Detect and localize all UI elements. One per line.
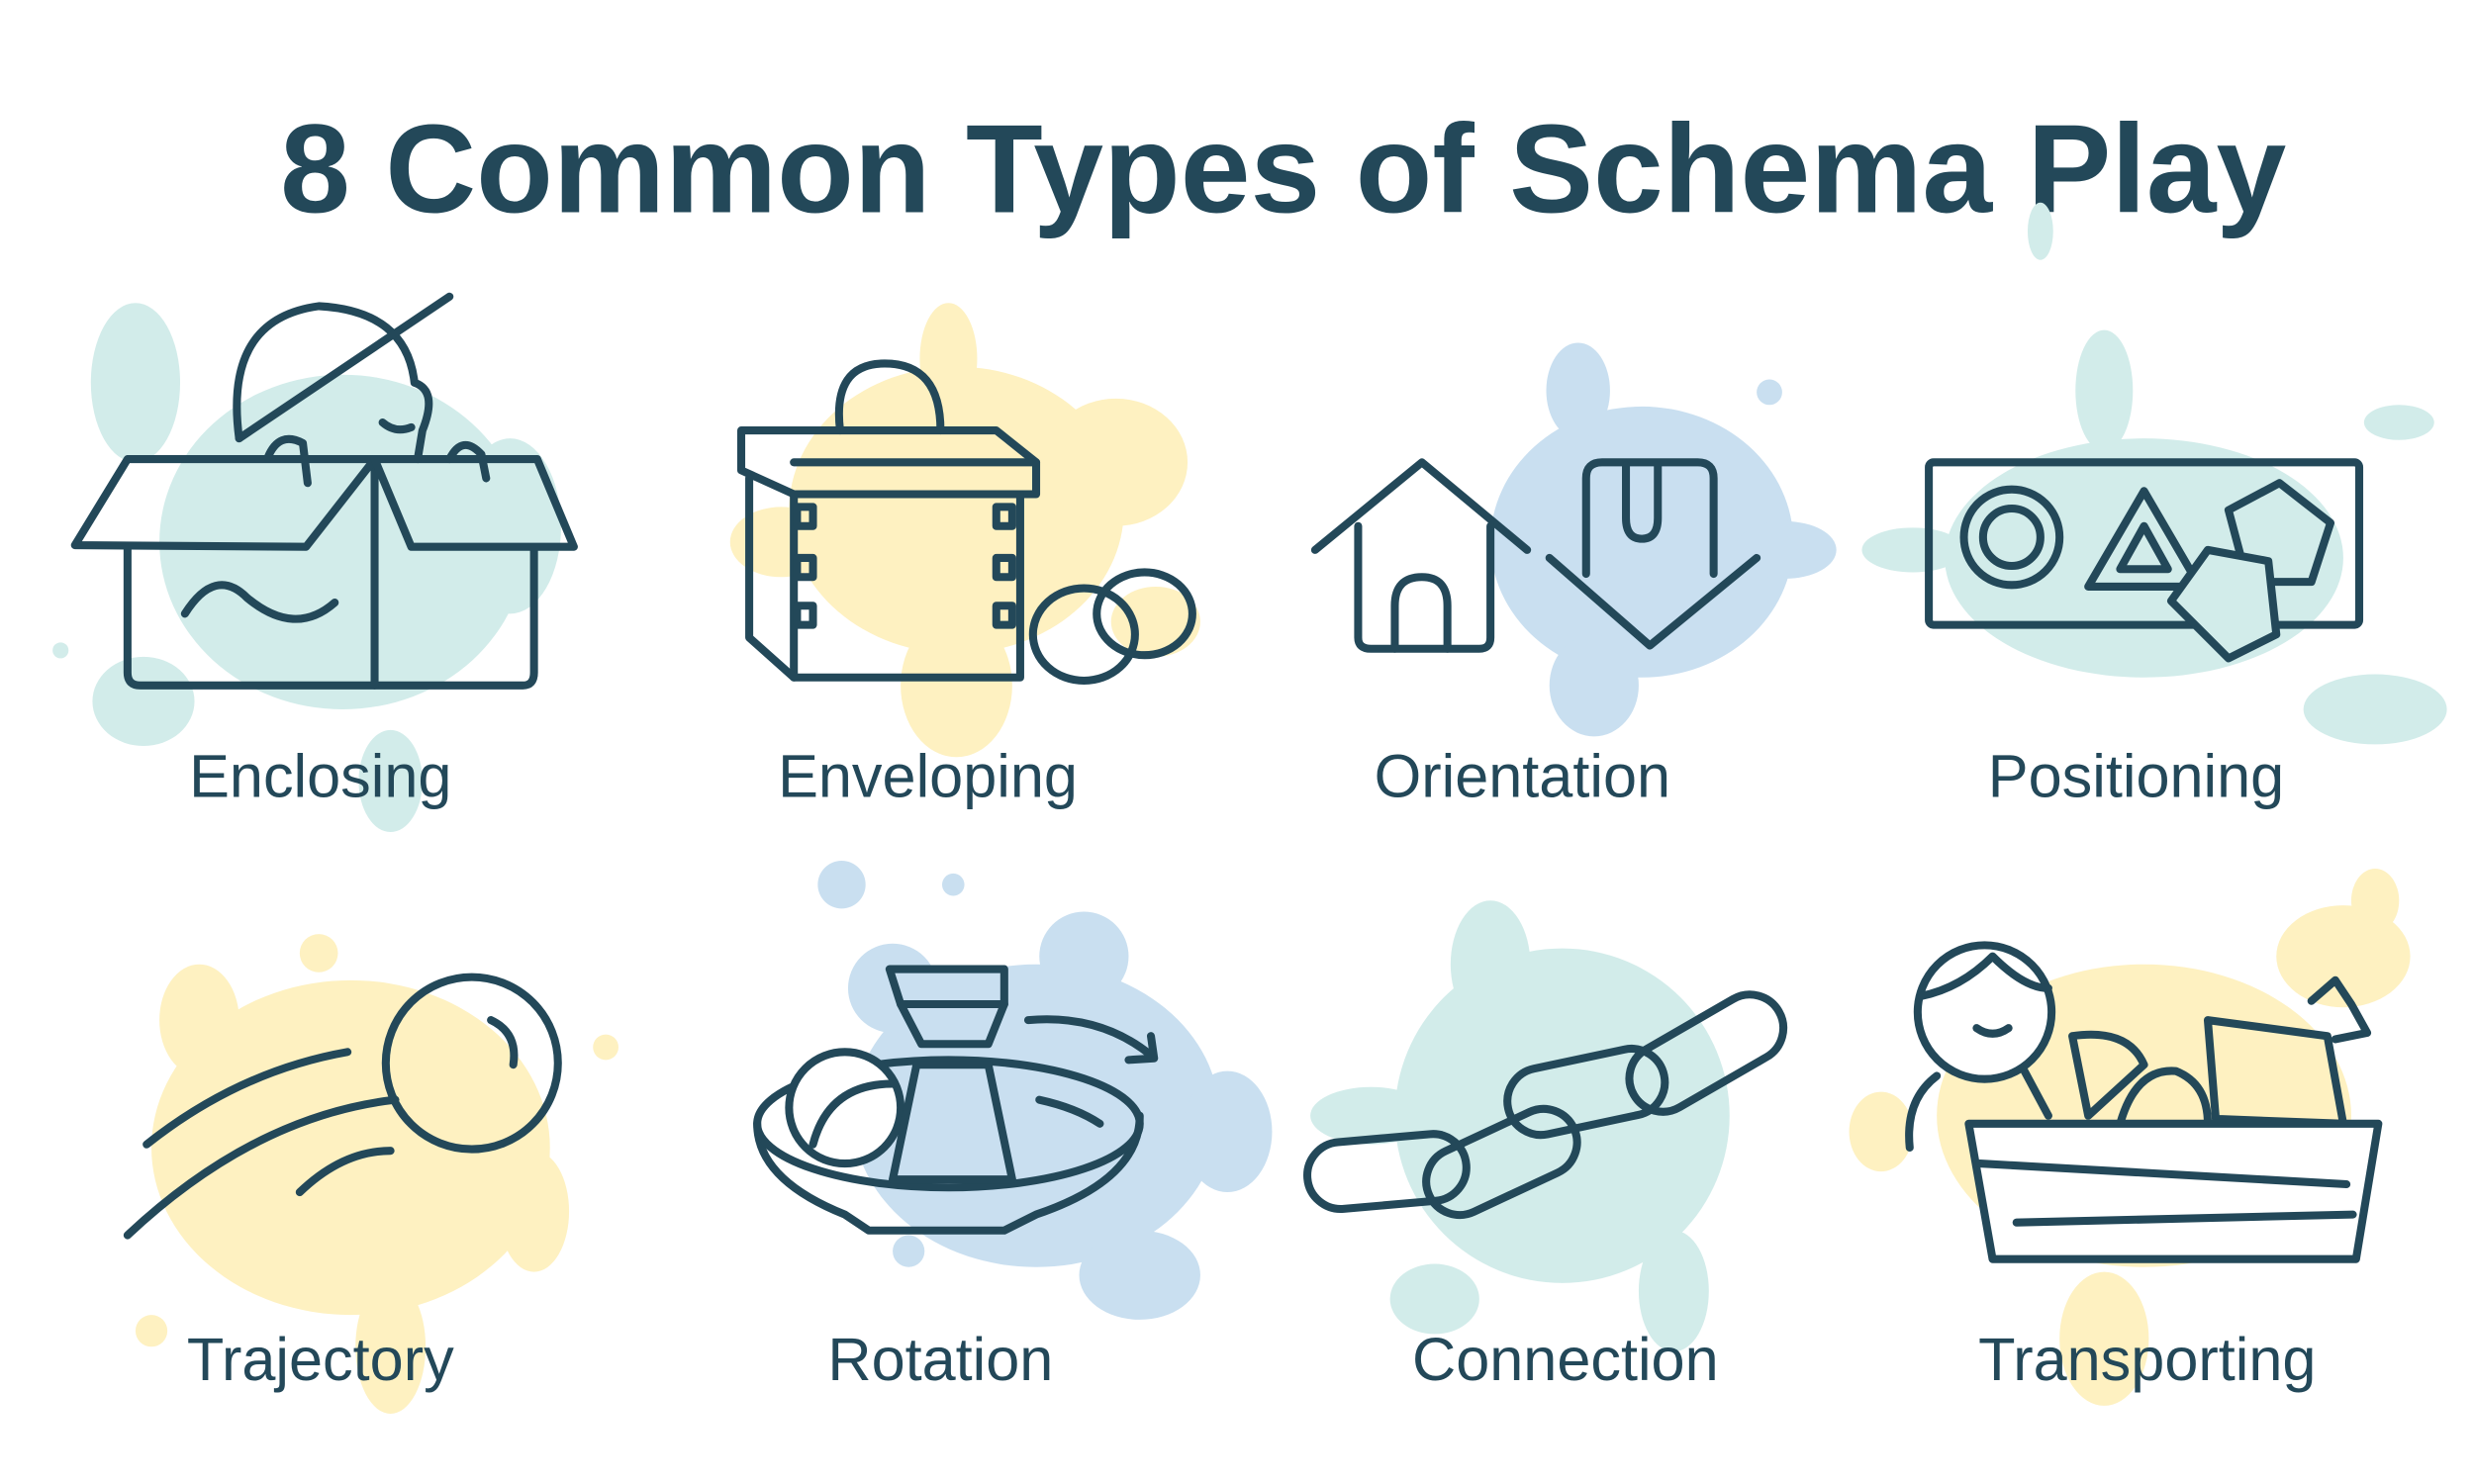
panel: rotation (757, 861, 1272, 1393)
panel: enveloping (730, 303, 1200, 810)
splash: yellow (1850, 869, 2411, 1406)
splash: teal (52, 303, 561, 832)
icon: spinning top in bowl (757, 970, 1154, 1231)
panel: transporting (1850, 869, 2411, 1406)
label: Orientation: Orientation (1375, 743, 1670, 810)
splash: yellow (730, 303, 1200, 757)
panel: connection (1304, 900, 1795, 1393)
label: Transporting: Transporting (1978, 1326, 2316, 1393)
panel: orientation (1315, 342, 1837, 810)
splash: teal (1861, 203, 2447, 744)
icon: chain links (1304, 982, 1795, 1226)
panel: positioning (1861, 203, 2447, 810)
splash: yellow (136, 934, 618, 1414)
icon: ball in flight (128, 977, 558, 1236)
splash: teal (1310, 900, 1730, 1351)
panel: trajectory (128, 934, 618, 1414)
panel: enclosing (52, 297, 574, 832)
label: Positioning: Positioning (1988, 743, 2284, 810)
icon: shapes board (1929, 462, 2359, 658)
title: 8 Common Types of Schema Play (280, 98, 2287, 238)
label: Connection: Connection (1412, 1326, 1719, 1393)
icon: box with ball and eggs (741, 363, 1192, 681)
label: Rotation: Rotation (827, 1326, 1053, 1393)
icon: house and bag (1315, 462, 1757, 649)
label: Trajectory: Trajectory (187, 1326, 454, 1393)
label: Enveloping: Enveloping (778, 743, 1078, 810)
splash: blue (817, 861, 1272, 1320)
label: Enclosing: Enclosing (189, 743, 451, 810)
splash: blue (1490, 342, 1837, 736)
icon: child with toy box (1909, 945, 2378, 1259)
icon: child in box (75, 297, 574, 686)
